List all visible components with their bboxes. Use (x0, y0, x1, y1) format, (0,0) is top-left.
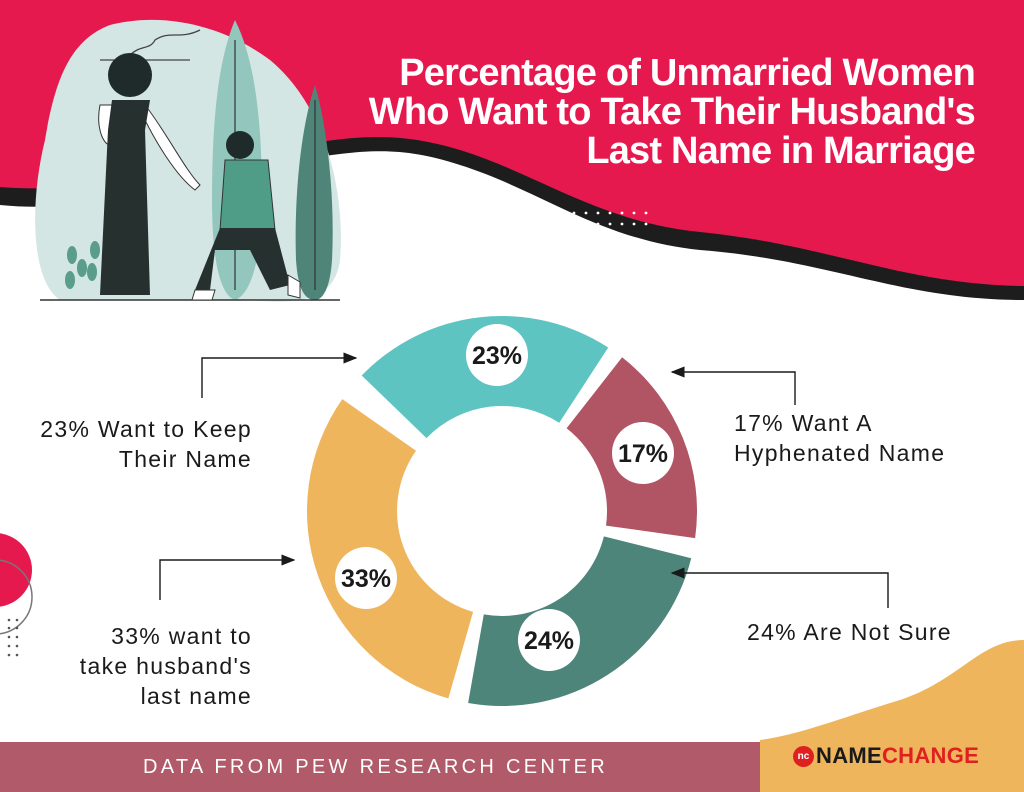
segment: 23% keep name: 23% (472, 342, 522, 370)
logo: CHANGE (882, 743, 979, 768)
title (368, 52, 975, 172)
label: keep name: Their Name (119, 446, 252, 472)
label: hyphenated: Hyphenated Name (734, 440, 945, 466)
label: take husband's name (80, 623, 252, 709)
label: hyphenated: 17% Want A (734, 410, 873, 436)
title: Percentage of Unmarried Women (399, 52, 975, 94)
label: hyphenated (734, 410, 945, 466)
segment: 23% keep name (362, 316, 608, 438)
logo (793, 743, 979, 768)
illustration: couple proposal (35, 20, 341, 302)
title: Who Want to Take Their Husband's (369, 91, 975, 133)
footer bar: DATA FROM PEW RESEARCH CENTER (143, 756, 608, 778)
label: not sure: 24% Are Not Sure (747, 619, 952, 645)
logo: nc (798, 750, 809, 762)
label: keep name (40, 416, 252, 472)
label: take husband's name: 33% want to (111, 623, 252, 649)
label: take husband's name: last name (141, 683, 252, 709)
label: take husband's name: take husband's (80, 653, 252, 679)
title: Last Name in Marriage (586, 130, 975, 172)
segment: 17% hyphenated (567, 357, 697, 538)
footer bar (0, 742, 760, 792)
logo: NAME (816, 743, 882, 768)
segment: 33% take husband's name: 33% (341, 565, 391, 593)
segment: 17% hyphenated: 17% (618, 440, 668, 468)
segment: 24% not sure: 24% (524, 627, 574, 655)
segment: 24% not sure (468, 536, 691, 706)
segment: 33% take husband's name (307, 399, 473, 698)
decorative dots under title (572, 212, 648, 226)
label: keep name: 23% Want to Keep (40, 416, 252, 442)
